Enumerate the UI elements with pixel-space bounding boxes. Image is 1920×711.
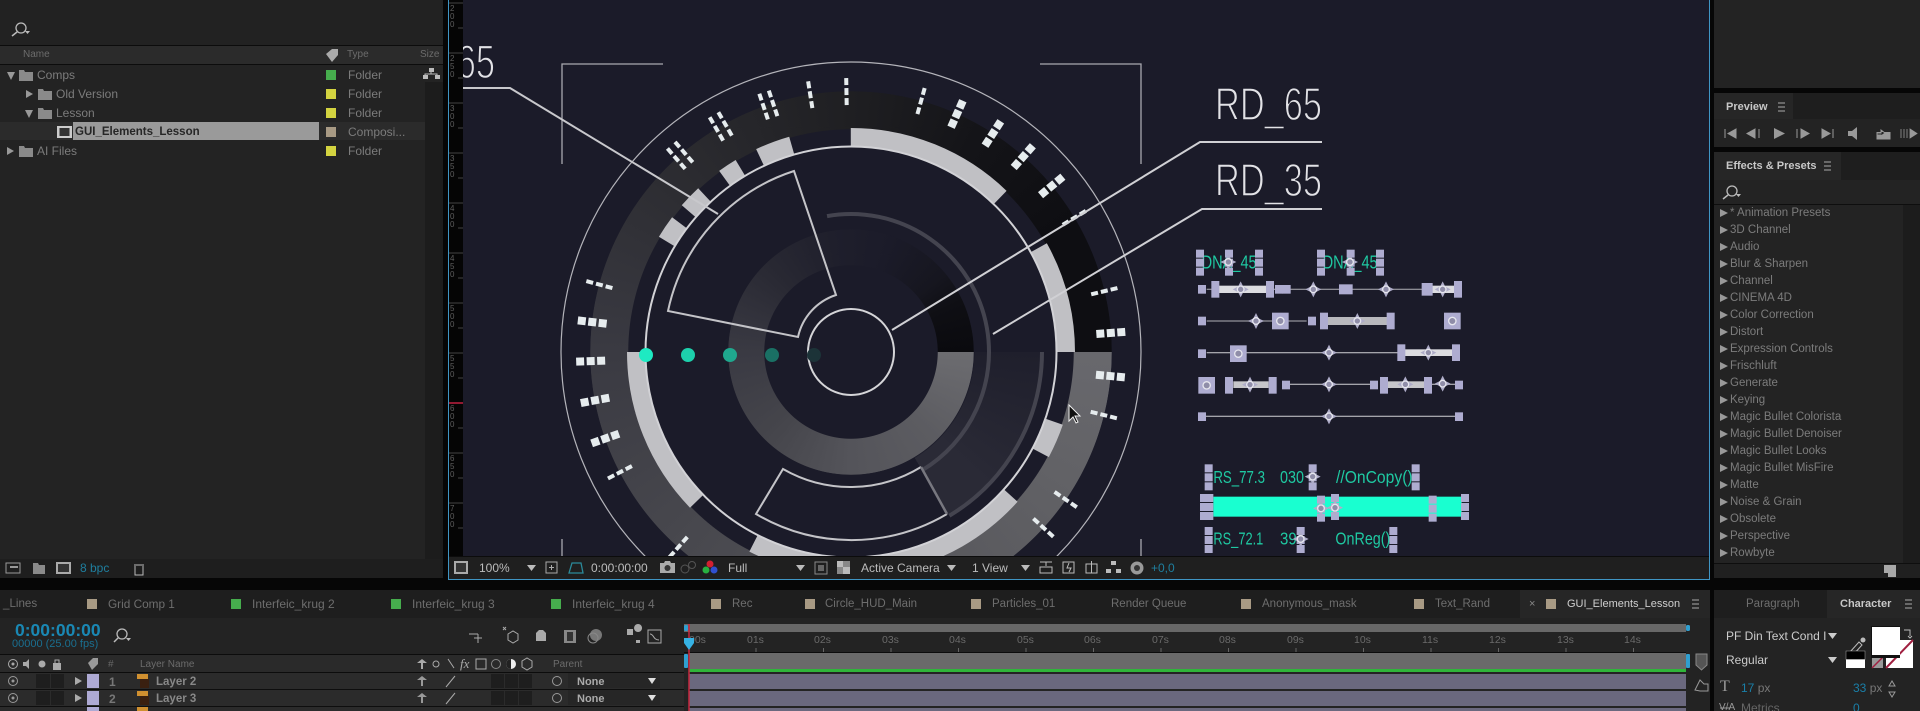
effects tab bar xyxy=(1714,152,1920,180)
vertical ruler: 0 xyxy=(450,320,455,329)
effects list: CINEMA 4D xyxy=(1730,292,1792,304)
timecode: 0:00:00:00 xyxy=(591,561,648,575)
vertical ruler: 0 xyxy=(450,220,455,229)
middle gradient ring xyxy=(728,229,974,475)
vertical ruler xyxy=(449,0,463,556)
character tab bar xyxy=(1714,590,1920,618)
callout line RD_65 xyxy=(892,142,1322,330)
rule row 2 xyxy=(1198,313,1461,329)
vertical ruler: 6 xyxy=(450,404,454,413)
mouse cursor xyxy=(1069,405,1080,423)
preview tab: Preview xyxy=(1726,101,1768,113)
composition tabs: Particles_01 xyxy=(992,598,1055,610)
project item names: Old Version xyxy=(56,87,118,101)
vertical ruler: 5 xyxy=(450,62,455,71)
time ruler: 11s xyxy=(1422,634,1438,646)
project label swatches and types: Folder xyxy=(348,68,382,82)
effects list divider xyxy=(1714,204,1920,205)
work area bar xyxy=(689,653,1686,669)
effects list: Frischluft xyxy=(1730,360,1777,372)
layer row 1 xyxy=(0,673,684,690)
selected layer handles panel xyxy=(1196,250,1469,553)
font family: PF Din Text Cond I xyxy=(1726,629,1826,643)
code label handles xyxy=(1200,464,1469,553)
upper-left wedge outline xyxy=(668,171,836,337)
project label swatches and types: Folder xyxy=(348,144,382,158)
effects tab: Effects & Presets xyxy=(1726,160,1816,172)
time ruler: 01s xyxy=(747,634,764,646)
size metrics xyxy=(1719,678,1882,711)
effects list: Audio xyxy=(1730,241,1759,253)
vertical ruler: 0 xyxy=(450,512,455,521)
vertical ruler: 7 xyxy=(450,504,454,513)
vertical ruler: 5 xyxy=(450,262,455,271)
playhead and work area handles xyxy=(684,624,1708,711)
time ruler: 07s xyxy=(1152,634,1169,646)
vertical ruler: 5 xyxy=(450,354,454,363)
vertical ruler: 0 xyxy=(450,520,455,529)
composition tabs: Text_Rand xyxy=(1435,598,1490,610)
project label swatches and types: Composi... xyxy=(348,125,405,139)
toolbar icons xyxy=(454,560,1144,574)
teal labels top xyxy=(1202,256,1376,272)
effects list: Blur & Sharpen xyxy=(1730,258,1808,270)
composition tabs: Interfeic_krug 4 xyxy=(572,597,655,611)
composition tabs: Anonymous_mask xyxy=(1262,598,1357,610)
effects list: Keying xyxy=(1730,394,1765,406)
vertical ruler: 0 xyxy=(450,20,455,29)
HUD line art xyxy=(463,46,1469,556)
teal dots xyxy=(639,348,821,362)
rule row 5 xyxy=(1198,408,1463,424)
font style: Regular xyxy=(1726,653,1768,667)
composition tabs: _Lines xyxy=(3,597,37,610)
lower wedge gray side xyxy=(921,467,947,514)
bright arc segments xyxy=(627,128,1075,556)
time ruler xyxy=(684,632,1686,653)
effects list: 3D Channel xyxy=(1730,224,1791,236)
swatches and icons xyxy=(1720,626,1914,708)
layer bar 1 xyxy=(689,674,1686,689)
teal code labels: RS_77.3 xyxy=(1213,467,1265,488)
preview tab xyxy=(1714,93,1793,119)
bright teal bar xyxy=(1213,497,1462,517)
effects search xyxy=(1722,185,1741,200)
teal code labels: 030 xyxy=(1280,467,1304,487)
callout line 65 xyxy=(463,88,718,214)
frame rate: 00000 (25.00 fps) xyxy=(12,638,98,650)
project item names: Comps xyxy=(37,68,75,82)
label 65: RD_65 xyxy=(388,35,495,88)
project label swatches and types: Folder xyxy=(348,106,382,120)
layer column header: fx xyxy=(460,656,469,671)
rule row 1 xyxy=(1198,281,1462,298)
search bar xyxy=(0,0,443,45)
panel: timeline xyxy=(0,590,1710,711)
character tab bar: Paragraph xyxy=(1746,598,1800,610)
layer column header: Parent xyxy=(553,659,582,670)
panel: project xyxy=(0,0,443,578)
project item names xyxy=(37,68,200,158)
project label swatches and types xyxy=(326,68,405,158)
effects tab xyxy=(1714,152,1841,180)
time ruler: 04s xyxy=(949,634,966,646)
teal code labels xyxy=(1213,467,1413,550)
teal code labels: 39 xyxy=(1280,529,1297,549)
top label handles xyxy=(1196,250,1384,276)
vertical ruler: 3 xyxy=(450,154,454,163)
teal code labels: //OnCopy() xyxy=(1336,467,1413,487)
inner dark sector xyxy=(915,388,1032,514)
thin outer circle xyxy=(560,61,1142,556)
time ruler: 00s xyxy=(689,634,706,646)
layer column header xyxy=(0,654,684,673)
vertical ruler: 4 xyxy=(450,254,454,263)
panel: composition viewer frame xyxy=(448,0,1710,580)
selected row band xyxy=(0,122,425,140)
exposure: +0,0 xyxy=(1151,561,1175,575)
radial tick marks xyxy=(576,78,1126,559)
current time: 0:00:00:00 xyxy=(15,620,101,640)
thin gray rings xyxy=(826,212,1044,518)
effects list: Obsolete xyxy=(1730,513,1776,525)
effects list xyxy=(1720,207,1842,559)
effects list: Noise & Grain xyxy=(1730,496,1802,508)
layer row 1: Layer 2 xyxy=(156,676,196,688)
viewer canvas xyxy=(463,46,1469,556)
vertical ruler: 0 xyxy=(450,212,455,221)
size metrics: 33 px xyxy=(1853,681,1882,695)
effects list: Color Correction xyxy=(1730,309,1814,321)
layer row 2 xyxy=(0,690,684,707)
panel: effects and presets xyxy=(1714,152,1920,578)
vertical ruler: 4 xyxy=(450,204,454,213)
timeline search xyxy=(114,628,131,642)
effects list: * Animation Presets xyxy=(1730,207,1830,219)
scroll column xyxy=(425,82,443,560)
active tab: GUI_Elements_Lesson xyxy=(1567,598,1680,610)
effects list: Channel xyxy=(1730,275,1773,287)
vertical ruler: 2 xyxy=(450,54,454,63)
composition tabs: Circle_HUD_Main xyxy=(825,598,917,610)
effects list: Distort xyxy=(1730,326,1763,338)
character tab bar: Character xyxy=(1840,598,1891,610)
composition tabs: Interfeic_krug 3 xyxy=(412,597,495,611)
effects list: Magic Bullet MisFire xyxy=(1730,462,1834,474)
teal code labels: OnReg() xyxy=(1335,529,1390,549)
viewer toolbar xyxy=(449,556,1709,579)
column header: Name xyxy=(23,49,50,60)
active tab xyxy=(1520,590,1710,618)
time ruler: 03s xyxy=(882,634,899,646)
effects list: Magic Bullet Looks xyxy=(1730,445,1827,457)
vertical ruler: 0 xyxy=(450,420,455,429)
vertical ruler: 0 xyxy=(450,70,455,79)
time ruler: 08s xyxy=(1219,634,1236,646)
effects scroll column xyxy=(1903,205,1920,563)
corner brackets xyxy=(562,64,1141,556)
timeline switches xyxy=(469,624,662,644)
effects list: Magic Bullet Denoiser xyxy=(1730,428,1842,440)
vertical ruler: 3 xyxy=(450,104,454,113)
layer bar 2 xyxy=(689,691,1686,706)
composition tabs: Render Queue xyxy=(1111,598,1186,610)
project item names: GUI_Elements_Lesson xyxy=(75,126,200,138)
view layout: 1 View xyxy=(972,561,1008,575)
tree icons xyxy=(7,68,440,157)
column header: Type xyxy=(347,49,369,60)
vertical ruler: 0 xyxy=(450,412,455,421)
label RD_35: RD_35 xyxy=(1215,154,1322,206)
time ruler: 06s xyxy=(1084,634,1101,646)
time ruler: 09s xyxy=(1287,634,1304,646)
teal labels top: DNA_45 xyxy=(1202,252,1257,274)
magnification: 100% xyxy=(479,561,510,575)
layer row 2: 2 xyxy=(109,692,116,706)
selected composition highlight xyxy=(73,122,319,140)
layer row 1: 1 xyxy=(109,675,116,689)
composition tabs: Grid Comp 1 xyxy=(108,597,175,611)
panel: preview xyxy=(1714,93,1920,147)
vertical ruler: 0 xyxy=(450,12,455,21)
project footer xyxy=(0,559,443,578)
time ruler: 05s xyxy=(1017,634,1034,646)
rule row 4 xyxy=(1198,376,1463,394)
outer gradient band xyxy=(590,92,1112,556)
vertical ruler: 5 xyxy=(450,304,454,313)
vertical ruler: 5 xyxy=(450,362,455,371)
panel: character xyxy=(1714,590,1920,711)
layer column header: Layer Name xyxy=(140,659,194,670)
vertical ruler: 5 xyxy=(450,162,455,171)
layer row 3 partial xyxy=(0,707,684,711)
time ruler: 02s xyxy=(814,634,831,646)
resolution: Full xyxy=(728,561,747,575)
active camera: Active Camera xyxy=(861,561,940,575)
white main circle xyxy=(646,146,1056,558)
composition tabs: Rec xyxy=(732,598,752,610)
composition tabs xyxy=(0,590,1710,618)
lower wedge outline xyxy=(756,467,947,540)
composition tabs: Interfeic_krug 2 xyxy=(252,597,335,611)
effects footer xyxy=(1714,563,1920,579)
vertical ruler: 0 xyxy=(450,270,455,279)
size metrics: T xyxy=(1720,678,1730,695)
project item names: AI Files xyxy=(37,144,77,158)
vertical ruler: 0 xyxy=(450,370,455,379)
label RD_65: RD_65 xyxy=(1215,78,1322,130)
vertical ruler: 0 xyxy=(450,170,455,179)
active tab: × xyxy=(1529,598,1535,610)
vertical ruler: 5 xyxy=(450,462,455,471)
layer bar 3 xyxy=(689,708,1686,711)
vertical ruler: 0 xyxy=(450,470,455,479)
time ruler: 10s xyxy=(1354,634,1371,646)
layer row 2: Layer 3 xyxy=(156,693,196,705)
project item names: Lesson xyxy=(56,106,95,120)
vertical ruler: 2 xyxy=(450,4,454,13)
center circle xyxy=(808,309,894,395)
vertical ruler: 0 xyxy=(450,120,455,129)
rule row 3 xyxy=(1198,344,1460,362)
time ruler: 12s xyxy=(1489,634,1506,646)
time ruler: 13s xyxy=(1557,634,1574,646)
time navigator bar xyxy=(684,624,1686,632)
effects list: Generate xyxy=(1730,377,1778,389)
effects list: Magic Bullet Colorista xyxy=(1730,411,1841,423)
column header xyxy=(0,45,443,65)
transport controls xyxy=(1724,127,1918,140)
layer row 2: None xyxy=(577,693,604,705)
preview tab bar xyxy=(1714,93,1920,119)
layer column header: # xyxy=(108,659,114,670)
effects list: Matte xyxy=(1730,479,1759,491)
project footer: 8 bpc xyxy=(80,561,109,575)
size metrics: 17 px xyxy=(1741,681,1770,695)
project label swatches and types: Folder xyxy=(348,87,382,101)
effects list: Perspective xyxy=(1730,530,1790,542)
layer row 1: None xyxy=(577,676,604,688)
teal labels top: DNA_45 xyxy=(1323,252,1378,274)
green render bar xyxy=(689,669,1686,672)
vertical ruler: 0 xyxy=(450,112,455,121)
callout line RD_35 xyxy=(993,209,1322,334)
effects list: Rowbyte xyxy=(1730,547,1775,559)
panel: top right empty xyxy=(1714,0,1920,88)
column header: Size xyxy=(420,49,439,60)
vertical ruler: 6 xyxy=(450,454,454,463)
effects list: Expression Controls xyxy=(1730,343,1833,355)
time ruler: 14s xyxy=(1624,634,1641,646)
vertical ruler: 0 xyxy=(450,312,455,321)
teal code labels: RS_72.1 xyxy=(1213,529,1263,550)
